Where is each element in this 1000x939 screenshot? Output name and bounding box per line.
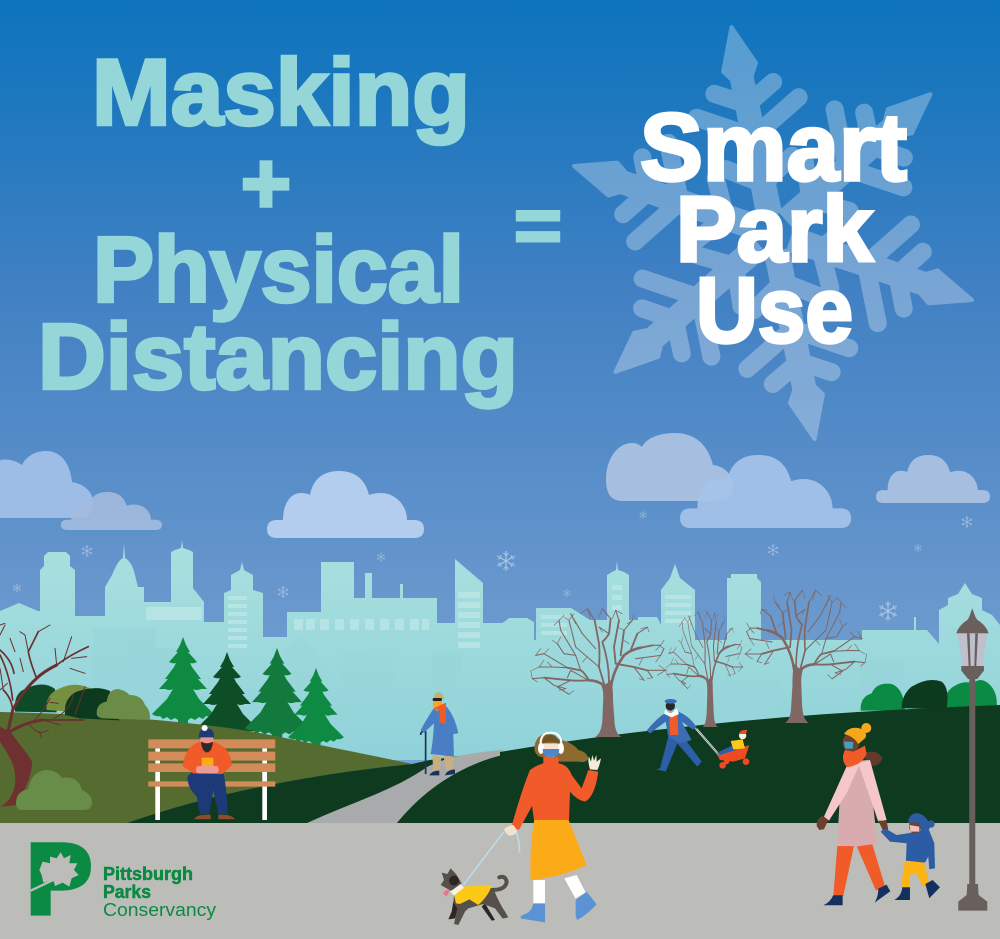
child face — [909, 819, 921, 833]
headband — [541, 733, 561, 745]
scarf — [433, 703, 446, 724]
cloud right back — [606, 433, 733, 501]
falling snowflakes — [13, 511, 972, 621]
word: Use: Use — [696, 258, 853, 362]
dark green foreground hill left — [127, 750, 503, 823]
child hat — [739, 730, 747, 734]
head — [666, 701, 675, 711]
bare tree 1 — [531, 609, 666, 737]
sunglasses — [433, 698, 442, 701]
clouds — [0, 433, 990, 538]
shoes — [429, 769, 455, 775]
beard — [201, 742, 213, 753]
boots — [521, 892, 597, 922]
bare tree left — [0, 623, 88, 807]
pine trees — [152, 637, 344, 751]
shirt — [669, 712, 678, 735]
street lamp — [956, 608, 989, 911]
bare tree 3 — [745, 590, 867, 723]
foreground building tints — [93, 628, 905, 727]
legs — [432, 755, 454, 772]
child pants — [901, 860, 929, 887]
sweater — [183, 742, 232, 774]
word: Park: Park — [676, 177, 873, 281]
dog jacket — [454, 885, 492, 905]
mother and child — [817, 723, 940, 905]
bench slats — [148, 739, 275, 787]
man pulling wagon — [647, 699, 749, 772]
mother right arm — [858, 760, 887, 822]
hair flowing — [534, 733, 588, 762]
lamp glass bars — [967, 633, 978, 666]
dog tail — [492, 877, 507, 890]
headline: left side of the equation — [38, 40, 518, 408]
legs — [187, 768, 228, 814]
mother hat pom — [861, 723, 871, 733]
lamp post — [969, 677, 975, 885]
mother mask — [844, 741, 853, 749]
dark green foreground hill right — [397, 705, 1000, 823]
cane — [421, 731, 426, 774]
hat — [199, 728, 214, 737]
ear muffs — [538, 743, 564, 754]
dog collar — [450, 884, 464, 896]
cloud left — [0, 451, 93, 518]
wordmark: Conservancy: Conservancy — [103, 900, 216, 920]
mother hat — [844, 728, 866, 744]
leash hand — [504, 825, 517, 836]
sidewalk — [0, 823, 1000, 939]
mother coat — [837, 760, 877, 847]
word: Distancing: Distancing — [38, 304, 518, 408]
child torso — [731, 739, 745, 749]
park bench with seated man — [148, 725, 275, 820]
wordmark: Parks: Parks — [103, 882, 151, 902]
shrubs on left hill — [15, 684, 150, 720]
oak leaf — [39, 852, 79, 887]
leash — [463, 832, 519, 885]
sweater — [512, 757, 598, 830]
word: Physical: Physical — [93, 218, 464, 322]
child coat — [881, 828, 935, 869]
skyline silhouette — [0, 540, 1000, 760]
collar — [664, 708, 679, 717]
hands — [196, 766, 219, 773]
collar and face — [200, 740, 213, 753]
hat pom — [202, 725, 208, 731]
hair top — [542, 734, 559, 744]
child hat — [908, 813, 930, 834]
mother hands — [817, 816, 888, 830]
Pittsburgh Parks Conservancy logo — [31, 842, 216, 920]
mother left arm — [824, 763, 859, 821]
logo mark: P with leaf — [31, 842, 91, 916]
skyline windows — [146, 585, 691, 648]
pine 2 — [196, 652, 258, 744]
face — [543, 743, 559, 757]
seated man — [183, 725, 235, 819]
pine 1 — [152, 637, 214, 729]
hat — [433, 692, 444, 699]
word: Smart: Smart — [640, 94, 907, 201]
cloud left small — [61, 492, 162, 530]
equals sign: = — [514, 181, 562, 269]
word: Masking: Masking — [92, 40, 470, 144]
face — [433, 697, 442, 711]
wagon handle — [695, 728, 720, 755]
pine 4 — [288, 668, 344, 751]
coat — [647, 712, 697, 743]
mother hair — [863, 752, 883, 766]
paved path — [307, 750, 503, 823]
mask — [543, 749, 559, 757]
cloud far right — [876, 455, 990, 503]
shoes — [194, 815, 235, 819]
mother pants — [833, 844, 885, 896]
elderly woman with cane — [421, 692, 458, 775]
leaf stem — [31, 880, 53, 891]
cloud right front — [680, 455, 851, 528]
mother face — [843, 733, 859, 752]
child legs — [717, 745, 736, 755]
waving hand — [588, 755, 601, 770]
legs — [656, 737, 702, 772]
dog near legs and body — [453, 887, 508, 925]
skirt — [530, 819, 587, 880]
dog tongue — [443, 890, 450, 897]
lamp glass — [958, 633, 987, 666]
snowflake behind headline — [528, 0, 1000, 480]
dog muzzle shade — [449, 876, 459, 886]
pine 3 — [245, 648, 309, 744]
bare tree 2 — [666, 612, 743, 727]
bush on left hill — [16, 770, 92, 810]
wordmark: Pittsburgh: Pittsburgh — [103, 864, 193, 884]
lamp neck — [961, 666, 984, 679]
hat — [665, 699, 677, 704]
lamp finial and roof — [956, 608, 989, 633]
mother shoes — [823, 885, 890, 905]
dog in yellow coat — [441, 868, 508, 925]
right hill shrubs — [861, 680, 997, 711]
child mask — [909, 825, 919, 832]
wagon wheels — [719, 758, 749, 769]
lamp base — [958, 884, 987, 911]
city skyline — [0, 540, 1000, 760]
mother scarf — [843, 746, 867, 767]
cloud centre — [267, 471, 424, 538]
dog head — [441, 868, 462, 892]
child boots — [894, 880, 940, 900]
wagon — [717, 745, 749, 762]
olive hill — [0, 712, 412, 823]
dog far legs — [448, 902, 495, 921]
legs — [533, 875, 586, 904]
bench legs — [155, 748, 267, 820]
child head — [739, 732, 746, 739]
child hat pom — [927, 820, 935, 828]
headline: Smart Park Use — [640, 94, 907, 362]
plus sign: + — [241, 136, 291, 232]
coat — [421, 707, 458, 757]
woman walking dog — [463, 733, 601, 922]
letter P — [31, 842, 91, 916]
book — [202, 758, 213, 770]
head — [200, 733, 214, 747]
